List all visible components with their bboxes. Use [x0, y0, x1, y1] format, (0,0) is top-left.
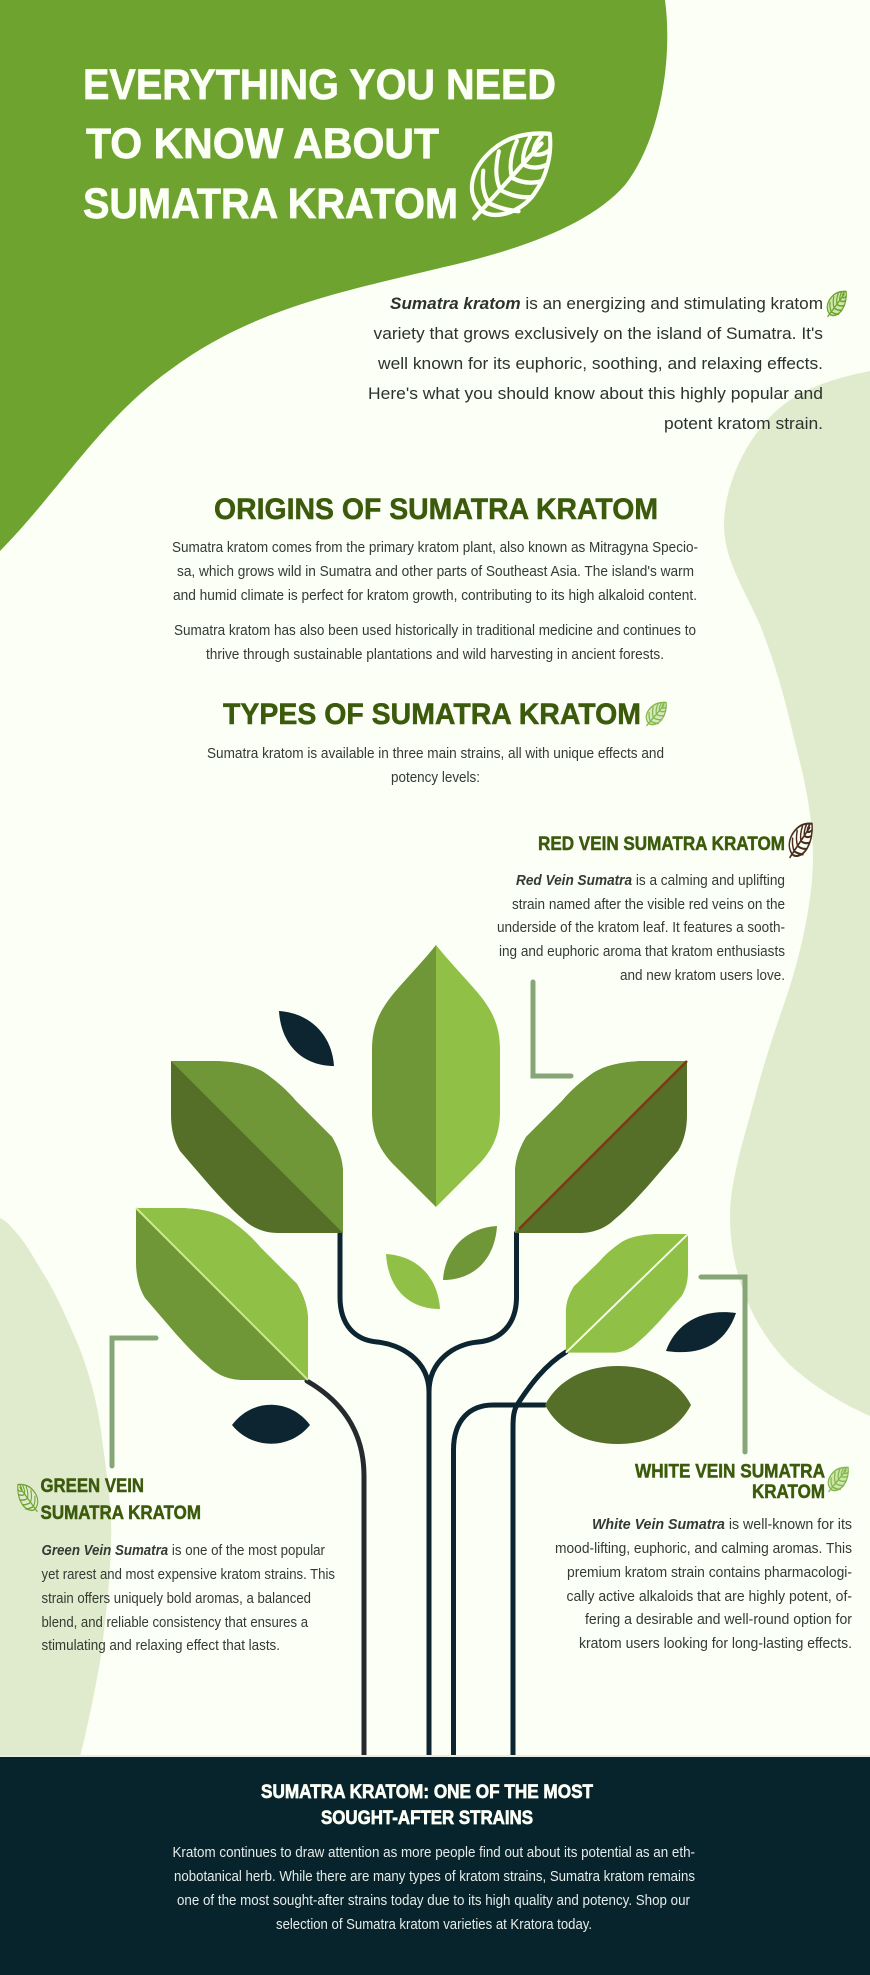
- intro text: Sumatra kratom is an energizing and stimulating kratom: [390, 294, 823, 313]
- green vein text: stimulating and relaxing effect that lasts.: [42, 1638, 280, 1654]
- heading: green vein: GREEN VEIN: [40, 1475, 144, 1497]
- red vein text: and new kratom users love.: [620, 968, 785, 984]
- leaf: upper left: [171, 1061, 343, 1233]
- red vein text: [497, 873, 785, 984]
- white vein text: White Vein Sumatra is well-known for its: [592, 1517, 852, 1533]
- leaf: small dark bottom: [232, 1405, 310, 1444]
- bracket: red vein pointer: [533, 982, 571, 1076]
- white vein text: [555, 1517, 852, 1652]
- intro text: well known for its euphoric, soothing, and relaxing effects.: [377, 354, 823, 373]
- bracket: green vein pointer: [112, 1338, 156, 1466]
- leaf: oval lower right: [545, 1366, 691, 1444]
- green vein text: [42, 1543, 335, 1654]
- icon: intro leaf: [827, 291, 846, 316]
- leaf: green vein lower left: [136, 1208, 308, 1380]
- leaf: upper right with red vein: [515, 1061, 687, 1233]
- footer text: one of the most sought-after strains today due to its high quality and potency. Shop our: [177, 1893, 690, 1909]
- plant stems: [307, 1233, 566, 1757]
- background blob: left: [0, 1218, 111, 1757]
- leaf: small mid-green centre: [443, 1226, 497, 1280]
- types text: Sumatra kratom is available in three main strains, all with unique effects and: [207, 746, 664, 762]
- heading: white vein: WHITE VEIN SUMATRA: [635, 1460, 825, 1482]
- footer text: [172, 1845, 695, 1933]
- intro text: [368, 294, 823, 433]
- heading: red vein: RED VEIN SUMATRA KRATOM: [538, 833, 785, 855]
- origins text: thrive through sustainable plantations and wild harvesting in ancient forests.: [206, 647, 664, 663]
- origins text: and humid climate is perfect for kratom growth, contributing to its high alkaloid content.: [173, 588, 697, 604]
- intro text: variety that grows exclusively on the island of Sumatra. It's: [374, 324, 823, 343]
- leaf: small light centre: [386, 1254, 440, 1309]
- footer heading: SUMATRA KRATOM: ONE OF THE MOST: [261, 1781, 593, 1803]
- header blob: [0, 0, 667, 551]
- footer band: [0, 1755, 870, 1975]
- red vein text: ing and euphoric aroma that kratom enthusiasts: [499, 944, 785, 960]
- origins text: Sumatra kratom has also been used historically in traditional medicine and continues to: [174, 623, 696, 639]
- red vein text: underside of the kratom leaf. It features a sooth-: [497, 920, 785, 936]
- leaf: white vein right: [566, 1234, 688, 1353]
- heading: origins: ORIGINS OF SUMATRA KRATOM: [214, 493, 658, 526]
- title: [83, 61, 556, 228]
- title: TO KNOW ABOUT: [86, 120, 439, 168]
- intro text: Here's what you should know about this highly popular and: [368, 384, 823, 403]
- heading: types: TYPES OF SUMATRA KRATOM: [223, 698, 641, 731]
- bracket: white vein pointer: [701, 1277, 745, 1452]
- leaf: top centre: [372, 945, 500, 1207]
- icon: white vein leaf: [828, 1467, 848, 1492]
- heading: white vein: KRATOM: [752, 1481, 825, 1503]
- white vein text: cally active alkaloids that are highly potent, of-: [566, 1589, 852, 1605]
- white vein text: fering a desirable and well-round option for: [585, 1612, 852, 1628]
- heading: green vein: [40, 1475, 201, 1524]
- background blob: right: [724, 371, 870, 1416]
- leaf: small dark top: [279, 1011, 334, 1066]
- icon: title leaf: [472, 133, 550, 218]
- white vein text: premium kratom strain contains pharmacologi-: [567, 1565, 852, 1581]
- icon: types leaf: [646, 702, 666, 726]
- white vein text: mood-lifting, euphoric, and calming aromas. This: [555, 1541, 852, 1557]
- title: EVERYTHING YOU NEED: [83, 61, 556, 109]
- footer heading: SOUGHT-AFTER STRAINS: [321, 1807, 533, 1829]
- red vein text: strain named after the visible red veins on the: [512, 897, 785, 913]
- green vein text: yet rarest and most expensive kratom strains. This: [42, 1567, 335, 1583]
- types text: [207, 746, 664, 786]
- green vein text: blend, and reliable consistency that ensures a: [42, 1615, 309, 1631]
- red vein text: Red Vein Sumatra is a calming and uplifting: [516, 873, 785, 889]
- origins text: Sumatra kratom comes from the primary kratom plant, also known as Mitragyna Specio-: [172, 540, 698, 556]
- intro text: potent kratom strain.: [664, 414, 823, 433]
- leaf: small dark right: [666, 1312, 736, 1352]
- title: SUMATRA KRATOM: [83, 180, 458, 228]
- icon: red vein leaf: [789, 824, 812, 857]
- origins text: sa, which grows wild in Sumatra and other parts of Southeast Asia. The island's warm: [177, 564, 694, 580]
- green vein text: strain offers uniquely bold aromas, a balanced: [42, 1591, 311, 1607]
- footer text: Kratom continues to draw attention as more people find out about its potential as an eth-: [172, 1845, 695, 1861]
- footer text: selection of Sumatra kratom varieties at Kratora today.: [276, 1917, 592, 1933]
- footer text: nobotanical herb. While there are many types of kratom strains, Sumatra kratom remains: [174, 1869, 695, 1885]
- heading: green vein: SUMATRA KRATOM: [40, 1502, 201, 1524]
- green vein text: Green Vein Sumatra is one of the most popular: [42, 1543, 325, 1559]
- white vein text: kratom users looking for long-lasting effects.: [579, 1636, 852, 1652]
- icon: green vein leaf: [18, 1484, 38, 1511]
- origins text: [172, 540, 698, 663]
- footer heading: [261, 1781, 593, 1829]
- heading: white vein: [635, 1460, 825, 1503]
- types text: potency levels:: [391, 770, 480, 786]
